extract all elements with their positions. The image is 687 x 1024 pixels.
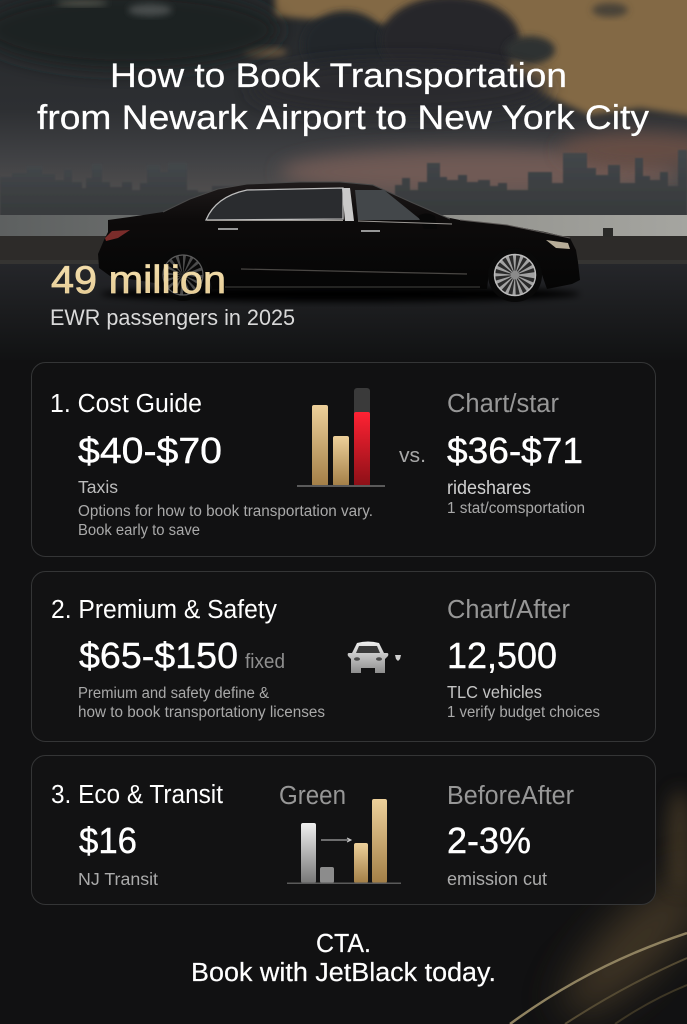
title: from Newark Airport to New York City: [37, 99, 650, 137]
heading: before after: BeforeAfter: [447, 782, 574, 810]
transit price: $16: [79, 820, 137, 861]
premium description: Premium and safety define &: [78, 685, 270, 702]
premium price: $65-$150: [79, 635, 238, 676]
body lines: [241, 269, 467, 274]
taxi price: Taxis: [78, 477, 118, 497]
lower streak: gold light trails: [510, 790, 687, 1024]
emission stat: 2-3%: [447, 820, 531, 861]
bar chart: before and after emissions: [287, 799, 401, 884]
taxi price: [78, 430, 222, 497]
road: [0, 264, 687, 328]
rideshare price: [447, 430, 585, 517]
heading: eco and transit: 3. Eco & Transit: [51, 781, 223, 809]
heading: premium and safety: 2. Premium & Safety: [51, 596, 277, 624]
cost description: Book early to save: [78, 522, 200, 539]
vehicles stat: [447, 635, 600, 721]
rideshare price: 1 stat/comsportation: [447, 500, 585, 517]
front window: [355, 190, 421, 220]
premium description: [78, 685, 325, 721]
roof highlight: [163, 182, 450, 219]
call to action: Book with JetBlack today.: [191, 959, 496, 987]
panel: cost guide: [32, 362, 656, 556]
panel: premium and safety: [32, 572, 656, 742]
hero stat: passengers: [50, 259, 295, 330]
icon: car and shield: [348, 642, 401, 673]
heading: green: Green: [279, 782, 346, 810]
vehicles stat: 1 verify budget choices: [447, 704, 600, 721]
city skyline: [0, 150, 687, 216]
head light: [546, 240, 570, 249]
transit price: NJ Transit: [78, 869, 158, 889]
panel: eco and transit: [32, 756, 656, 904]
car body: [98, 182, 580, 289]
water: [0, 215, 687, 237]
call to action: [191, 930, 496, 987]
hero photo: sky, skyline, waterfront and road: [0, 0, 687, 360]
title: How to Book Transportation: [110, 57, 567, 95]
taxi price: $40-$70: [78, 430, 222, 471]
heading: chart after: Chart/After: [447, 596, 571, 624]
premium description: how to book transportationy licenses: [78, 704, 325, 721]
transit price: [78, 820, 158, 889]
premium price: fixed: [245, 651, 285, 673]
tail light: [105, 230, 130, 241]
bar chart: cost comparison: [297, 388, 385, 487]
title: [37, 57, 650, 137]
cost description: [78, 503, 373, 539]
limousine photo: [98, 182, 580, 302]
vehicles stat: TLC vehicles: [447, 682, 542, 702]
emission stat: emission cut: [447, 869, 547, 889]
front wheel: [488, 248, 542, 302]
rear wheel: [157, 249, 209, 301]
rideshare price: rideshares: [447, 478, 531, 499]
heading: cost guide: 1. Cost Guide: [50, 390, 202, 418]
emission stat: [447, 820, 547, 889]
chrome pillar: [342, 188, 354, 221]
vehicles stat: 12,500: [447, 635, 557, 676]
rideshare price: $36-$71: [447, 430, 583, 471]
heading: chart star: Chart/star: [447, 390, 560, 418]
vs label: vs.: [399, 445, 426, 467]
mirror: [418, 214, 437, 229]
hero stat: passengers: 49 million: [51, 259, 226, 302]
hero stat: passengers: EWR passengers in 2025: [50, 305, 295, 330]
cost description: Options for how to book transportation vary.: [78, 503, 373, 520]
seawall: [0, 236, 687, 260]
call to action: CTA.: [316, 930, 371, 958]
sky glow and clouds: [0, 0, 687, 196]
rear window: [206, 188, 343, 220]
